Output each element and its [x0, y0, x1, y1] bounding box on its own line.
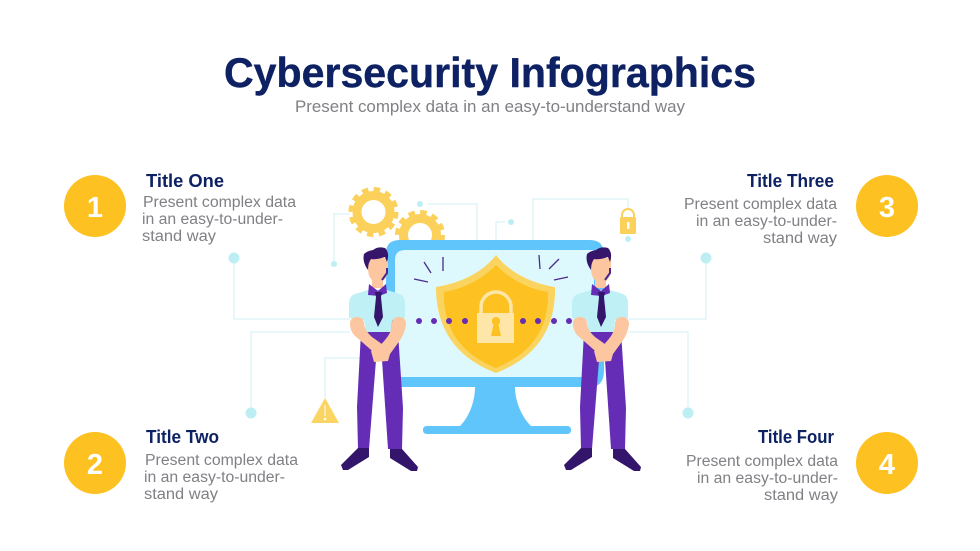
text: description one: Present complex data [143, 194, 296, 211]
text: description three: Present complex data [684, 196, 837, 213]
security shield with padlock [436, 255, 555, 373]
number 2: 2 [87, 449, 103, 481]
keyhole [491, 317, 501, 336]
shirt [349, 290, 405, 332]
number 4: 4 [879, 449, 895, 481]
shoes [564, 448, 641, 471]
person left [341, 247, 418, 471]
shoes [341, 448, 418, 471]
right arm and hands [594, 317, 629, 362]
collar [591, 284, 610, 296]
title: Cybersecurity Infographics [224, 49, 756, 96]
number 1: 1 [87, 192, 103, 224]
item 1 [64, 171, 296, 245]
heading: title four: Title Four [758, 427, 834, 447]
hair [586, 247, 611, 270]
heading: title two: Title Two [146, 427, 219, 447]
item 2 [64, 427, 298, 503]
face [591, 258, 611, 282]
heading: title one: Title One [146, 171, 224, 191]
padlock body [477, 313, 514, 343]
text: description two: in an easy-to-under- [144, 469, 285, 486]
left arm [350, 317, 386, 356]
dotted connection [416, 318, 572, 324]
connector lines [234, 199, 706, 413]
left arm [573, 317, 609, 356]
heading: title three: Title Three [747, 171, 834, 191]
badge 2 [64, 432, 126, 494]
person right [564, 247, 641, 471]
padlock shackle [481, 292, 511, 314]
right arm and hands [371, 317, 406, 362]
tie [597, 292, 606, 327]
item 3 [684, 171, 918, 247]
neck [372, 276, 383, 288]
icon: warning triangle [311, 398, 339, 423]
text: description one: stand way [142, 228, 216, 245]
hair [364, 247, 388, 270]
shield outer [436, 255, 555, 373]
alert sparks [414, 255, 568, 282]
headset [605, 268, 610, 280]
subtitle: Present complex data in an easy-to-understand way [295, 97, 685, 116]
connector dots [228, 201, 712, 418]
shield inner [444, 265, 548, 368]
badge 4 [856, 432, 918, 494]
headset [382, 268, 387, 280]
icon: small padlock [620, 209, 636, 234]
collar [368, 284, 387, 296]
text: description two: stand way [144, 486, 218, 503]
item 4 [686, 427, 918, 504]
tie [374, 292, 383, 327]
badge 3 [856, 175, 918, 237]
badge 1 [64, 175, 126, 237]
text: description four: stand way [764, 487, 838, 504]
text: description two: Present complex data [145, 452, 298, 469]
legs [580, 332, 626, 449]
shirt [572, 290, 628, 332]
number 3: 3 [879, 192, 895, 224]
icon: gears [351, 190, 442, 258]
monitor screen [395, 250, 594, 377]
monitor [386, 240, 604, 434]
monitor stand [423, 387, 571, 434]
neck [595, 276, 606, 288]
monitor frame [386, 240, 604, 387]
legs [357, 332, 403, 449]
face [368, 258, 388, 282]
text: description three: in an easy-to-under- [696, 213, 837, 230]
text: description four: Present complex data [686, 453, 838, 470]
text: description four: in an easy-to-under- [697, 470, 838, 487]
text: description three: stand way [763, 230, 837, 247]
text: description one: in an easy-to-under- [142, 211, 283, 228]
